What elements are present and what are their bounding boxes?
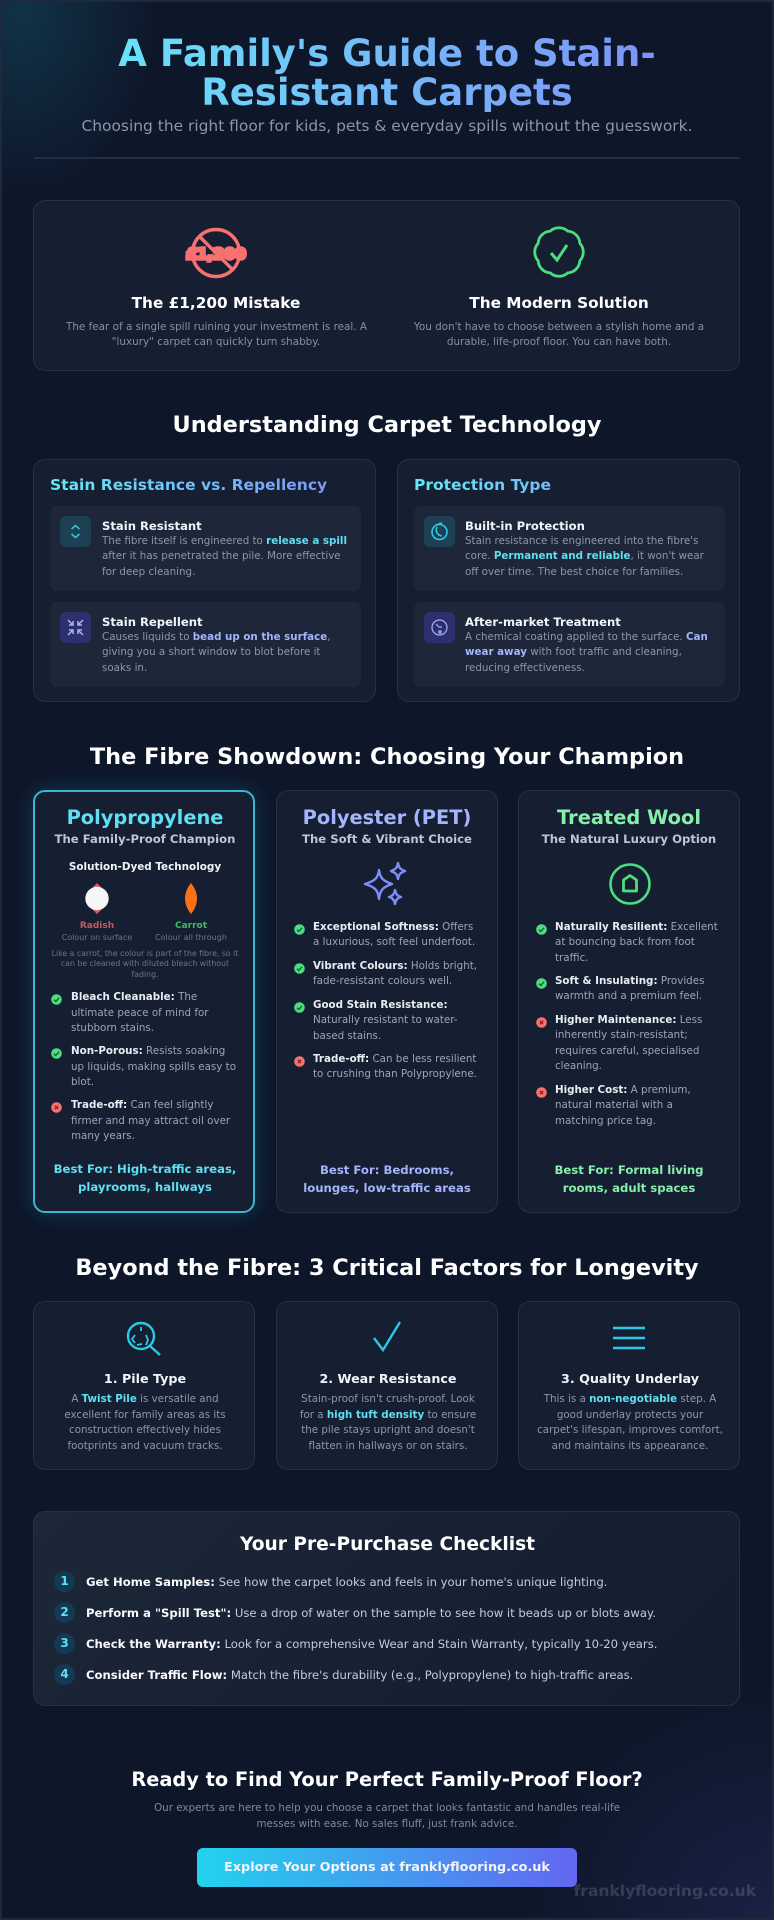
heading: critical factors: Beyond the Fibre: 3 Critical Factors for Longevity [75, 1255, 699, 1281]
best for: Best For: Bedrooms, [320, 1163, 454, 1177]
list item: exceptional softness: Exceptional Softness: Offers [313, 920, 473, 932]
note: Like a carrot, the colour is part of the fibre, so it [52, 949, 238, 958]
card: built-in protection: off over time. The best choice for families. [465, 566, 683, 578]
checklist item 1: Get Home Samples: See how the carpet looks and feels in your home's unique lighting. [86, 1575, 607, 1589]
panel: the problem and the solution [33, 200, 740, 371]
tagline: The Soft & Vibrant Choice [302, 832, 472, 846]
panel: pile type [33, 1301, 255, 1470]
card: stain resistant: Stain Resistant [102, 518, 202, 532]
card: after-market treatment: After-market Treatment [465, 614, 621, 628]
checklist item 1: 1 [60, 1574, 69, 1588]
checklist item 1 [54, 1571, 607, 1592]
list item: higher cost: matching price tag. [555, 1114, 656, 1126]
heading: 1. Pile Type [104, 1370, 186, 1386]
text [537, 1393, 723, 1452]
label: radish: Radish [80, 921, 114, 931]
checklist item 2: Perform a "Spill Test": Use a drop of water on the sample to see how it beads up or blots away. [86, 1606, 656, 1620]
icon: chevrons [60, 516, 91, 547]
text: mistake: "luxury" carpet can quickly turn shabby. [112, 336, 320, 348]
panel: wear resistance [276, 1301, 498, 1470]
list item: non-porous: Non-Porous: Resists soaking [71, 1045, 225, 1057]
title: A Family's Guide to Stain- [118, 32, 656, 75]
heading: solution: The Modern Solution [469, 294, 649, 312]
list item: bleach cleanable: Bleach Cleanable: The [71, 991, 197, 1003]
text: flatten in hallways or on stairs. [308, 1440, 468, 1452]
card: stain repellent [50, 602, 361, 687]
list item: good stain resistance: Naturally resistant to water- [313, 1014, 458, 1026]
call-to-action text [154, 1802, 620, 1830]
heading: 2. Wear Resistance [319, 1370, 457, 1386]
checklist item 4: 4 [60, 1667, 69, 1681]
icon: inward arrows [60, 612, 91, 643]
best for: lounges, low-traffic areas [303, 1181, 471, 1195]
text: the pile stays upright and doesn't [301, 1424, 475, 1436]
text: for a high tuft density to ensure [300, 1409, 476, 1421]
card: built-in protection: Stain resistance is engineered into the fibre's [465, 535, 698, 547]
card: built-in protection: core. Permanent and reliable, it won't wear [465, 550, 704, 562]
text: footprints and vacuum tracks. [67, 1440, 222, 1452]
title: Resistant Carpets [201, 71, 573, 114]
list item: higher maintenance: cleaning. [555, 1060, 602, 1072]
panel: checklist [33, 1511, 740, 1706]
text: good underlay protects your [557, 1409, 703, 1421]
checklist item 4: Consider Traffic Flow: Match the fibre's durability (e.g., Polypropylene) to high-traffic areas. [86, 1668, 633, 1682]
text: This is a non-negotiable step. A [544, 1393, 716, 1405]
card: after-market treatment: wear away with foot traffic and cleaning, [465, 646, 682, 658]
list item: vibrant colours: fade-resistant colours well. [313, 975, 452, 987]
text: mistake [66, 320, 367, 348]
caption: carrot: Colour all through [155, 933, 227, 942]
list item: exceptional softness: a luxurious, soft feel underfoot. [313, 936, 475, 948]
list item: non-porous [51, 1045, 236, 1088]
list item: soft and insulating: Soft & Insulating: Provides [555, 974, 704, 986]
card: stain resistant: after it has penetrated the pile. More effective [102, 550, 341, 562]
panel: treated wool [518, 790, 740, 1213]
best for: rooms, adult spaces [563, 1181, 695, 1195]
list item: trade-off: Trade-off: Can feel slightly [71, 1099, 213, 1111]
note: can be cleaned with diluted bleach without [61, 959, 229, 968]
list item: higher maintenance: Higher Maintenance: Less [555, 1014, 702, 1026]
list item: good stain resistance: based stains. [313, 1030, 381, 1042]
text: construction effectively hides [69, 1424, 221, 1436]
panel: protection type [397, 459, 740, 702]
heading: Stain Resistance vs. Repellency [50, 476, 327, 494]
card: stain repellent: giving you a short window to blot before it [102, 646, 320, 658]
name: Polypropylene [67, 806, 223, 829]
name: Treated Wool [557, 806, 701, 829]
heading: mistake: The £1,200 Mistake [132, 294, 300, 312]
call-to-action heading: Ready to Find Your Perfect Family-Proof Floor? [131, 1768, 643, 1791]
text: solution: You don't have to choose between a stylish home and a [414, 320, 704, 332]
checklist item 4 [54, 1664, 633, 1685]
best for [303, 1163, 471, 1195]
icon: layers [613, 1326, 645, 1350]
text: mistake: The fear of a single spill ruining your investment is real. A [66, 320, 367, 332]
heading: carpet technology: Understanding Carpet Technology [173, 412, 601, 438]
list item: trade-off [51, 1099, 230, 1142]
heading: Protection Type [414, 476, 551, 494]
best for [554, 1163, 704, 1195]
note [52, 949, 238, 979]
list item: higher cost [536, 1084, 691, 1126]
best for [54, 1162, 236, 1194]
list item: soft and insulating [536, 974, 704, 1002]
subheading: solution-dyed: Solution-Dyed Technology [69, 861, 221, 873]
panel: polypropylene [33, 790, 255, 1213]
checklist item 2: 2 [60, 1605, 69, 1619]
title [118, 32, 656, 114]
list item: bleach cleanable [51, 991, 209, 1034]
best for: playrooms, hallways [78, 1180, 212, 1194]
list item: higher maintenance: requires careful, specialised [555, 1044, 699, 1056]
list item: higher maintenance [536, 1014, 702, 1072]
icon: ring [424, 516, 455, 547]
checklist item 2 [54, 1602, 656, 1623]
text: A Twist Pile is versatile and [71, 1393, 219, 1405]
checklist item 3: Check the Warranty: Look for a comprehensive Wear and Stain Warranty, typically 10-20 years. [86, 1637, 657, 1651]
call-to-action text: Our experts are here to help you choose a carpet that looks fantastic and handles real-life [154, 1802, 620, 1814]
checklist item 3: 3 [60, 1636, 69, 1650]
list item: naturally resilient [536, 920, 718, 964]
checklist item 3 [54, 1633, 657, 1654]
icon: tick [373, 1322, 401, 1352]
card: stain resistant: The fibre itself is engineered to release a spill [102, 535, 347, 547]
icon: sparkles [364, 862, 406, 906]
list item: naturally resilient: at bouncing back from foot [555, 936, 695, 948]
list item: trade-off: Trade-off: Can be less resilient [313, 1052, 476, 1064]
icon: dial [424, 612, 455, 643]
list item: exceptional softness [294, 920, 475, 948]
note: fading. [131, 970, 158, 979]
list item: good stain resistance: Good Stain Resistance: [313, 998, 448, 1010]
list item: higher cost: natural material with a [555, 1099, 673, 1111]
list item: non-porous: blot. [71, 1076, 94, 1088]
icon: radish [85, 883, 109, 914]
list item: naturally resilient: traffic. [555, 952, 589, 964]
list item: higher cost: Higher Cost: A premium, [555, 1084, 691, 1096]
best for: Best For: High-traffic areas, [54, 1162, 236, 1176]
subtitle: Choosing the right floor for kids, pets & everyday spills without the guesswork. [81, 117, 693, 135]
card: built-in protection [414, 506, 725, 591]
heading: 3. Quality Underlay [561, 1370, 699, 1386]
tagline: The Natural Luxury Option [542, 832, 716, 846]
text: solution [414, 320, 704, 348]
list item: trade-off: firmer and may attract oil over [71, 1114, 230, 1126]
panel: quality underlay [518, 1301, 740, 1470]
list item: trade-off: to crushing than Polypropylene. [313, 1068, 477, 1080]
watermark: franklyflooring.co.uk [574, 1882, 756, 1900]
icon: ring with house [609, 863, 651, 905]
card: after-market treatment: reducing effectiveness. [465, 662, 585, 674]
tagline: The Family-Proof Champion [55, 832, 235, 846]
call-to-action text: messes with ease. No sales fluff, just frank advice. [256, 1818, 517, 1830]
list item: vibrant colours [294, 960, 477, 987]
heading: fibre showdown: The Fibre Showdown: Choosing Your Champion [90, 744, 684, 770]
card: stain repellent: Stain Repellent [102, 614, 203, 628]
list item: soft and insulating: warmth and a premium feel. [555, 990, 702, 1002]
list item: bleach cleanable: ultimate peace of mind for [71, 1006, 209, 1018]
text [64, 1393, 226, 1452]
card: after-market treatment [414, 602, 725, 687]
icon: crossed-out price [185, 228, 247, 278]
text [300, 1393, 476, 1452]
list item: good stain resistance [294, 998, 458, 1042]
card: after-market treatment: A chemical coating applied to the surface. Can [465, 631, 708, 643]
list item: non-porous: up liquids, making spills easy to [71, 1060, 236, 1072]
text: and maintains its appearance. [552, 1440, 708, 1452]
icon: magnifier [126, 1322, 161, 1356]
text: excellent for family areas as its [64, 1409, 226, 1421]
heading [414, 476, 725, 495]
icon: badge check [533, 226, 585, 278]
card: stain repellent: Causes liquids to bead up on the surface, [102, 631, 330, 643]
caption: radish: Colour on surface [62, 933, 132, 942]
list item: naturally resilient: Naturally Resilient: Excellent [555, 920, 718, 932]
best for: Best For: Formal living [554, 1163, 704, 1177]
icon: crossed-out price: £1,200 [186, 245, 246, 263]
label: carrot: Carrot [175, 921, 207, 931]
panel: polyester [276, 790, 498, 1213]
text: carpet's lifespan, improves comfort, [537, 1424, 723, 1436]
list item: higher maintenance: inherently stain-resistant; [555, 1029, 688, 1041]
heading: Your Pre-Purchase Checklist [240, 1534, 535, 1554]
card: stain resistant: for deep cleaning. [102, 566, 195, 578]
card: stain repellent: soaks in. [102, 662, 147, 674]
card: built-in protection: Built-in Protection [465, 518, 585, 532]
name: Polyester (PET) [303, 806, 471, 829]
card: stain resistant [50, 506, 361, 591]
list item: trade-off [294, 1052, 477, 1080]
panel: stain resistance vs repellency [33, 459, 376, 702]
text: solution: durable, life-proof floor. You can have both. [447, 336, 671, 348]
icon: carrot [185, 883, 197, 914]
list item: vibrant colours: Vibrant Colours: Holds bright, [313, 960, 477, 972]
call-to-action button: Explore Your Options at franklyflooring.co.uk [224, 1860, 550, 1875]
list item: trade-off: many years. [71, 1130, 135, 1142]
call-to-action button [197, 1848, 577, 1887]
text: Stain-proof isn't crush-proof. Look [301, 1393, 475, 1405]
list item: bleach cleanable: stubborn stains. [71, 1022, 154, 1034]
